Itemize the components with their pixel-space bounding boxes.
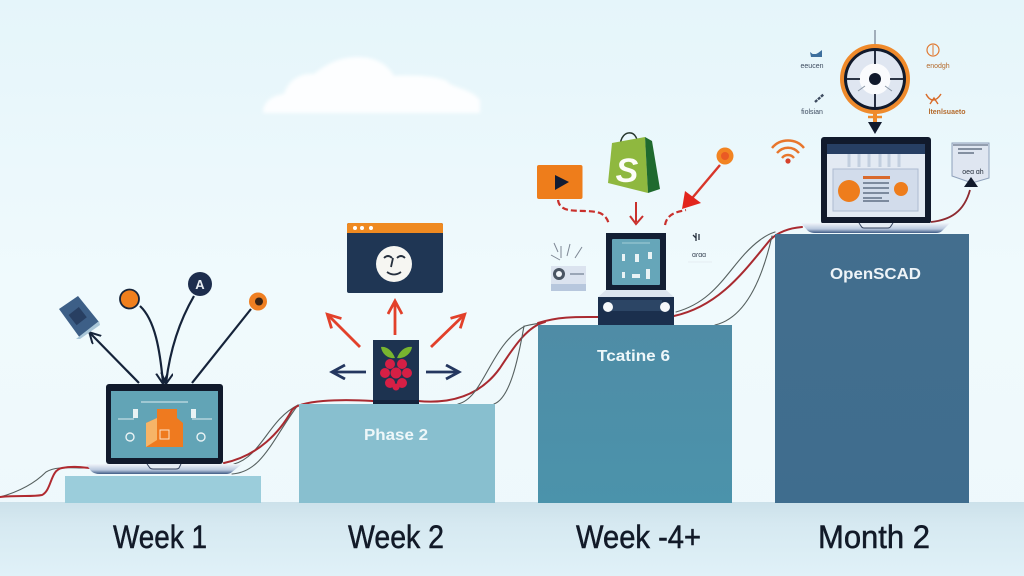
arrow to document — [931, 177, 978, 222]
icon: wifi — [772, 140, 804, 164]
laptop: month 2 — [801, 137, 950, 233]
small label right of monitor: ɑɾɑɑ — [692, 252, 706, 259]
monitor — [606, 233, 666, 290]
small label right of monitor — [688, 233, 712, 262]
gadget with sparks — [551, 243, 586, 291]
stage block: OpenSCAD — [775, 234, 969, 503]
icon: orange dot — [249, 292, 267, 310]
block label: Tcatine 6: Tcatine 6 — [597, 348, 670, 365]
monitor base — [598, 290, 674, 325]
timeline label: Week -4+: Week -4+ — [576, 519, 701, 555]
icon label: top right — [926, 44, 950, 70]
icon label: top left: eeucen — [801, 63, 824, 70]
week 1 arrows — [90, 296, 251, 383]
icon label: bottom left — [801, 94, 824, 116]
icon: navy circle A: A — [195, 277, 205, 292]
icon: Shopify bag — [608, 133, 660, 193]
icon: navy circle A — [188, 272, 212, 296]
icon: video play — [537, 165, 582, 199]
icon: document — [952, 143, 989, 183]
icon: document: oeɑ ɑh — [962, 169, 984, 176]
timeline label: Week 1: Week 1 — [113, 519, 207, 555]
icon: orange node — [716, 148, 734, 164]
icon label: bottom left: fiolsian — [801, 109, 823, 116]
timeline label: Month 2: Month 2 — [818, 519, 930, 555]
icon: Raspberry Pi board — [373, 340, 419, 404]
icon: orange circle — [120, 290, 139, 308]
stage block: Tcatine 6 — [538, 325, 732, 503]
top line into dial — [874, 30, 876, 44]
laptop: week 1 — [86, 384, 242, 474]
icon: book — [59, 296, 100, 339]
icon label: top left — [801, 50, 824, 70]
icon: Shopify bag: S — [616, 152, 639, 190]
wires: connecting cables — [0, 227, 802, 497]
dial arrow — [868, 112, 882, 134]
ground band — [0, 502, 1024, 576]
icon label: bottom right — [926, 94, 965, 116]
timeline label: Week 2: Week 2 — [348, 519, 444, 555]
browser window with face — [347, 223, 443, 293]
arrowhead: red triangle — [682, 191, 701, 209]
dial target — [840, 44, 910, 114]
navy arrows — [333, 371, 458, 373]
block label: Phase 2: Phase 2 — [364, 427, 428, 444]
cloud — [263, 57, 480, 113]
icon label: top right: enodgh — [926, 63, 950, 70]
block label: OpenSCAD: OpenSCAD — [830, 266, 921, 283]
stage block: week 1 — [65, 476, 261, 503]
stage block: phase 2 — [299, 404, 495, 503]
icon label: bottom right: ltenlsuaeto — [929, 109, 965, 116]
dashed arrows and red arrows into monitor — [558, 165, 720, 225]
red arrows from Raspberry Pi — [328, 302, 464, 347]
